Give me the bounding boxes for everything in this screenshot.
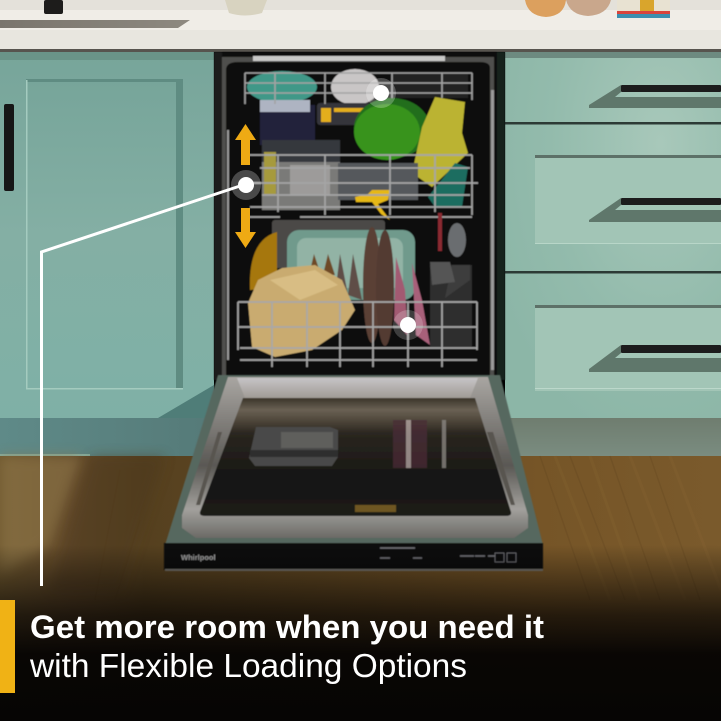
control panel <box>164 543 543 571</box>
hotspot: lower rack <box>393 310 423 340</box>
detergent dispenser <box>249 427 338 466</box>
left toe kick <box>0 418 214 456</box>
dishwasher interior <box>214 52 505 380</box>
lower rack items <box>248 213 472 357</box>
bottom fade <box>0 545 721 721</box>
brand: Whirlpool <box>181 553 216 562</box>
caption <box>29 609 544 684</box>
pink reflection <box>355 420 446 512</box>
middle rack wires <box>240 155 478 217</box>
wood floor <box>0 456 721 721</box>
yellow accent bar <box>0 600 15 693</box>
middle rack items <box>262 140 418 220</box>
adjust down arrow <box>235 208 256 248</box>
adjust up arrow <box>235 124 256 165</box>
callout leader line <box>42 184 246 586</box>
left cabinet door <box>0 52 214 418</box>
lower rack wires <box>238 302 477 367</box>
door outer frame <box>165 375 543 545</box>
hotspot: middle rack <box>231 170 261 200</box>
countertop <box>0 0 721 52</box>
upper rack wires <box>245 73 472 104</box>
caption heading: Get more room when you need it <box>30 609 544 645</box>
upper rack items <box>247 69 468 207</box>
tub floor <box>200 398 511 516</box>
hotspot: top rack <box>366 78 396 108</box>
caption subheading: with Flexible Loading Options <box>29 647 467 684</box>
right cabinet drawers <box>505 52 721 456</box>
open dishwasher door <box>164 375 543 571</box>
tub rim <box>182 377 528 538</box>
counter decor <box>225 0 670 18</box>
tub lip <box>237 378 478 398</box>
sink and faucet <box>0 0 190 28</box>
